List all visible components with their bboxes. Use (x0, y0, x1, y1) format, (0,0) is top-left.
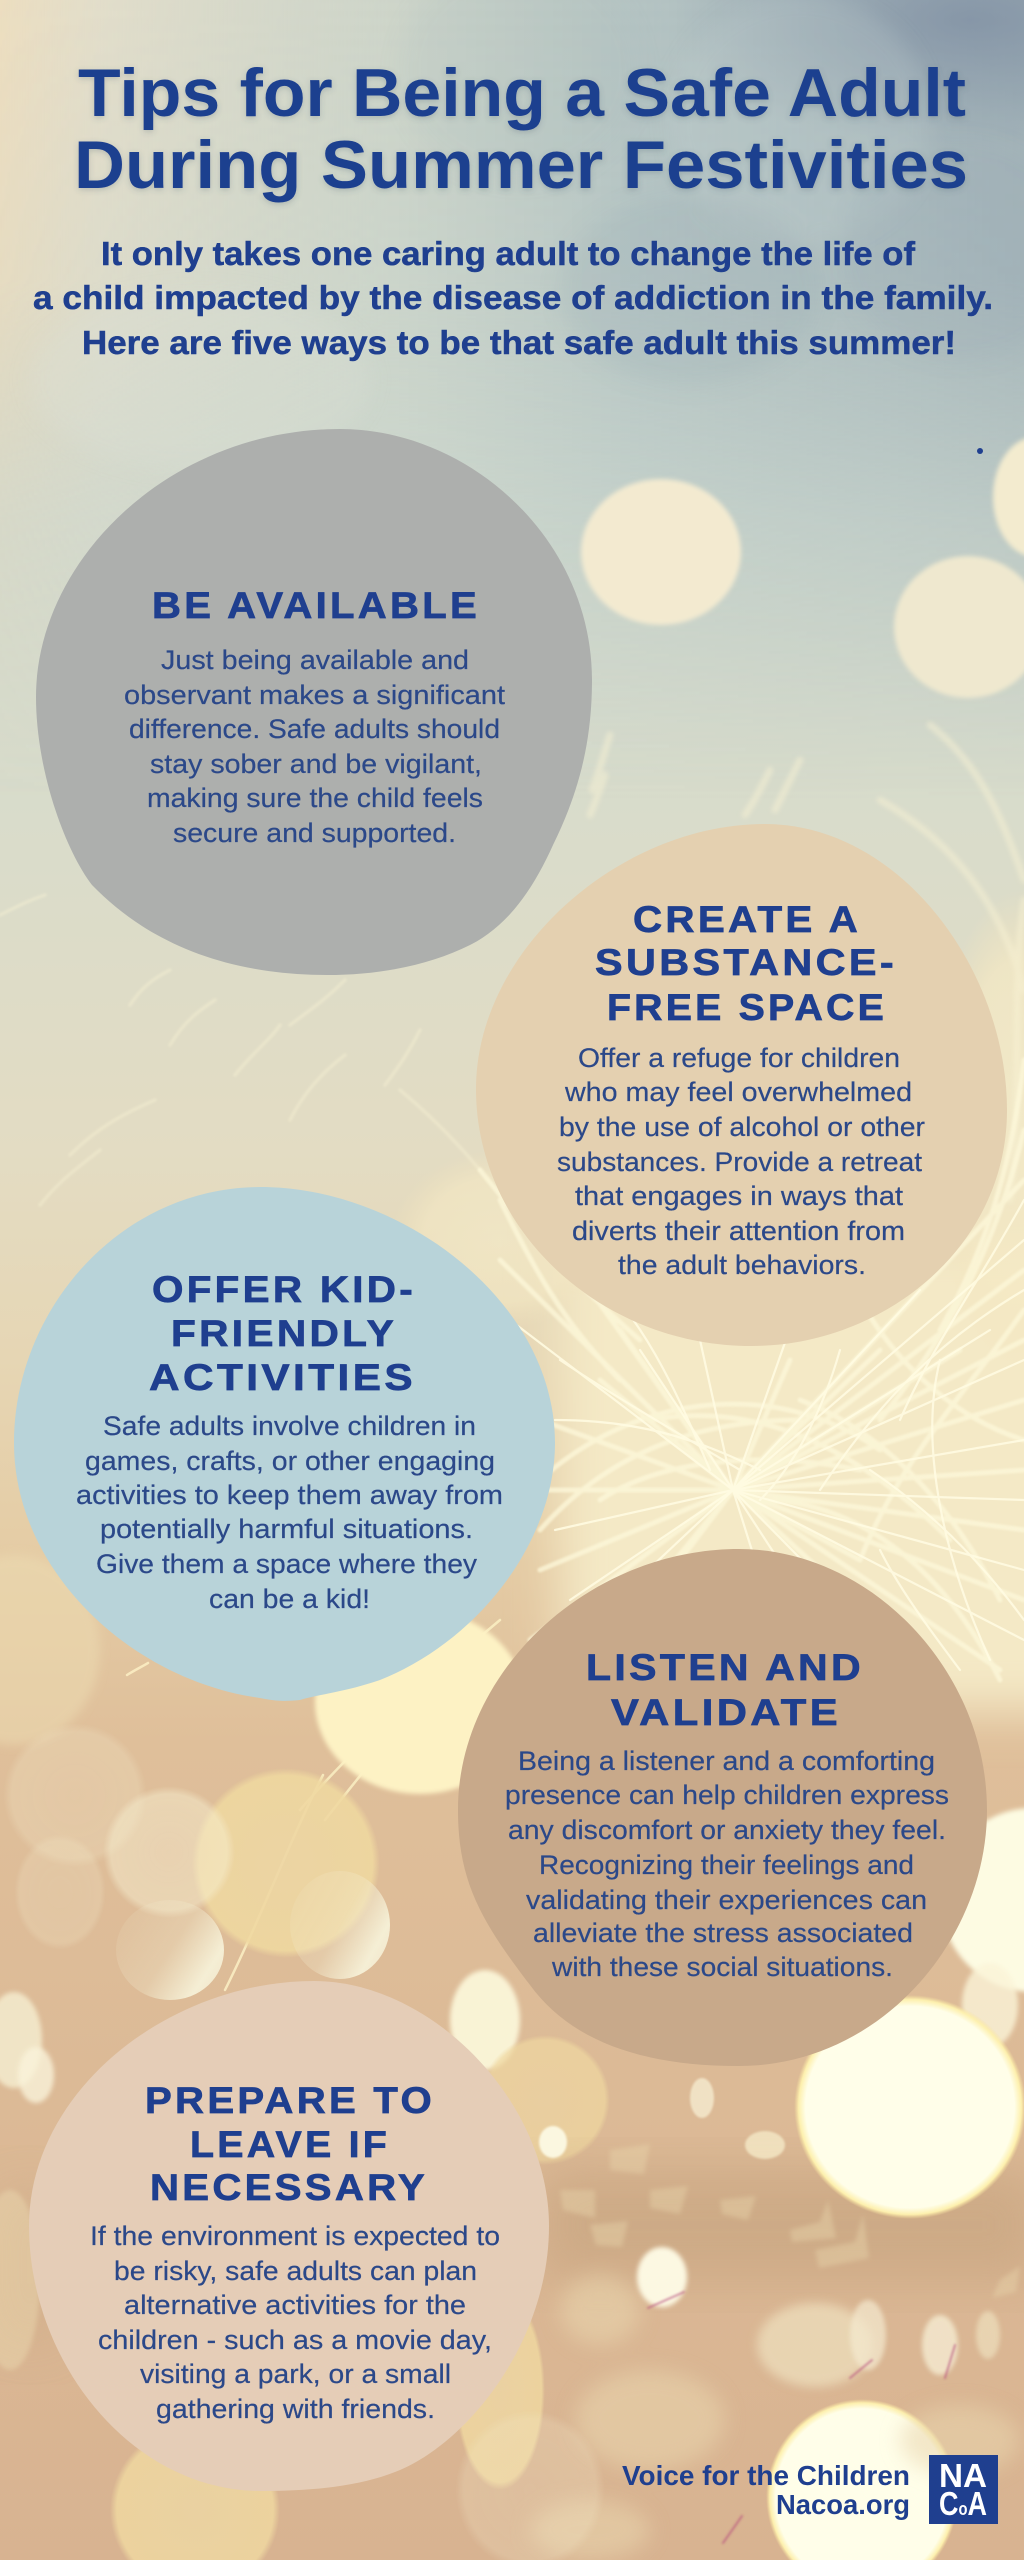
panel: be available: secure and supported. (173, 818, 456, 848)
panel: create a substance-free space: SUBSTANCE- (595, 942, 897, 983)
panel: create a substance-free space: FREE SPACE (607, 987, 887, 1028)
panel: offer kid-friendly activities (14, 1187, 555, 1701)
panel: prepare to leave if necessary: NECESSARY (150, 2167, 428, 2208)
panel: be available: BE AVAILABLE (152, 585, 480, 626)
panel: offer kid-friendly activities: games, crafts, or other engaging (85, 1446, 495, 1476)
panel: offer kid-friendly activities: activities to keep them away from (76, 1480, 503, 1510)
sparks across lower left (127, 1620, 500, 1990)
firework glow (560, 1240, 1024, 1710)
panel: create a substance-free space: by the use of alcohol or other (559, 1112, 925, 1142)
logo: NACoA: NA (939, 2457, 987, 2494)
panel: prepare to leave if necessary: be risky, safe adults can plan (114, 2256, 477, 2286)
lower bokeh lights (0, 1555, 1024, 2560)
stray dot (977, 448, 983, 454)
panel: listen and validate: VALIDATE (611, 1692, 841, 1733)
panel: create a substance-free space: CREATE A (633, 899, 861, 940)
panel: listen and validate: with these social situations. (551, 1952, 893, 1982)
panel: be available (36, 429, 592, 975)
panel: offer kid-friendly activities: OFFER KID- (152, 1269, 416, 1310)
panel: listen and validate: presence can help children express (505, 1780, 949, 1810)
title: Tips for Being a Safe Adult (78, 55, 966, 131)
title (74, 55, 968, 203)
firework streaks (0, 725, 1024, 1990)
panel: be available: Just being available and (161, 645, 469, 675)
intro text: a child impacted by the disease of addiction in the family. (33, 279, 993, 316)
panel: prepare to leave if necessary: children - such as a movie day, (98, 2325, 492, 2355)
panel: listen and validate: alleviate the stress associated (533, 1918, 913, 1948)
title: During Summer Festivities (74, 127, 968, 203)
intro text (33, 235, 993, 361)
panel: create a substance-free space: that engages in ways that (575, 1181, 904, 1211)
logo: NACoA: CoA (939, 2485, 987, 2522)
panel: create a substance-free space: the adult behaviors. (618, 1250, 866, 1280)
panel: create a substance-free space: substances. Provide a retreat (557, 1147, 923, 1177)
panel: offer kid-friendly activities: potentially harmful situations. (100, 1514, 473, 1544)
panel: prepare to leave if necessary: PREPARE TO (145, 2080, 435, 2121)
translucent haze discs at top (30, 0, 1024, 470)
panel: prepare to leave if necessary: visiting a park, or a small (140, 2359, 451, 2389)
panel: listen and validate: validating their experiences can (526, 1885, 927, 1915)
panel: listen and validate: any discomfort or anxiety they feel. (508, 1815, 946, 1845)
footer: tagline: Nacoa.org (776, 2489, 910, 2520)
panel: listen and validate: Being a listener and a comforting (518, 1746, 935, 1776)
small petals (539, 2126, 567, 2158)
footer: tagline: Voice for the Children (622, 2460, 910, 2491)
panel: be available: difference. Safe adults should (129, 714, 500, 744)
panel: be available: stay sober and be vigilant, (150, 749, 482, 779)
panel: offer kid-friendly activities: can be a kid! (209, 1584, 370, 1614)
mottled band (540, 2170, 1024, 2280)
panel: prepare to leave if necessary: If the environment is expected to (90, 2221, 500, 2251)
panel: prepare to leave if necessary: gathering with friends. (156, 2394, 435, 2424)
panel: create a substance-free space: diverts their attention from (572, 1216, 905, 1246)
panel: prepare to leave if necessary (29, 1981, 549, 2491)
panel: listen and validate: LISTEN AND (586, 1647, 864, 1688)
intro text: Here are five ways to be that safe adult this summer! (82, 324, 956, 361)
panel: listen and validate (458, 1549, 987, 2066)
panel: listen and validate: Recognizing their feelings and (539, 1850, 914, 1880)
panel: create a substance-free space: who may feel overwhelmed (564, 1077, 912, 1107)
panel: create a substance-free space: Offer a refuge for children (578, 1043, 900, 1073)
panel: create a substance-free space (476, 824, 1007, 1346)
panel: offer kid-friendly activities: ACTIVITIES (149, 1357, 416, 1398)
logo: NACoA (929, 2455, 998, 2524)
panel: offer kid-friendly activities: FRIENDLY (171, 1313, 397, 1354)
intro text: It only takes one caring adult to change the life of (101, 235, 916, 272)
panel: be available: making sure the child feels (147, 783, 483, 813)
pale swirls (530, 2275, 1020, 2560)
panel: be available: observant makes a significant (124, 680, 506, 710)
panel: prepare to leave if necessary: LEAVE IF (190, 2124, 390, 2165)
upper bokeh lights (581, 437, 1024, 698)
panel: offer kid-friendly activities: Give them a space where they (96, 1549, 478, 1579)
panel: prepare to leave if necessary: alternative activities for the (124, 2290, 466, 2320)
panel: offer kid-friendly activities: Safe adults involve children in (103, 1411, 476, 1441)
footer: tagline (622, 2460, 910, 2520)
